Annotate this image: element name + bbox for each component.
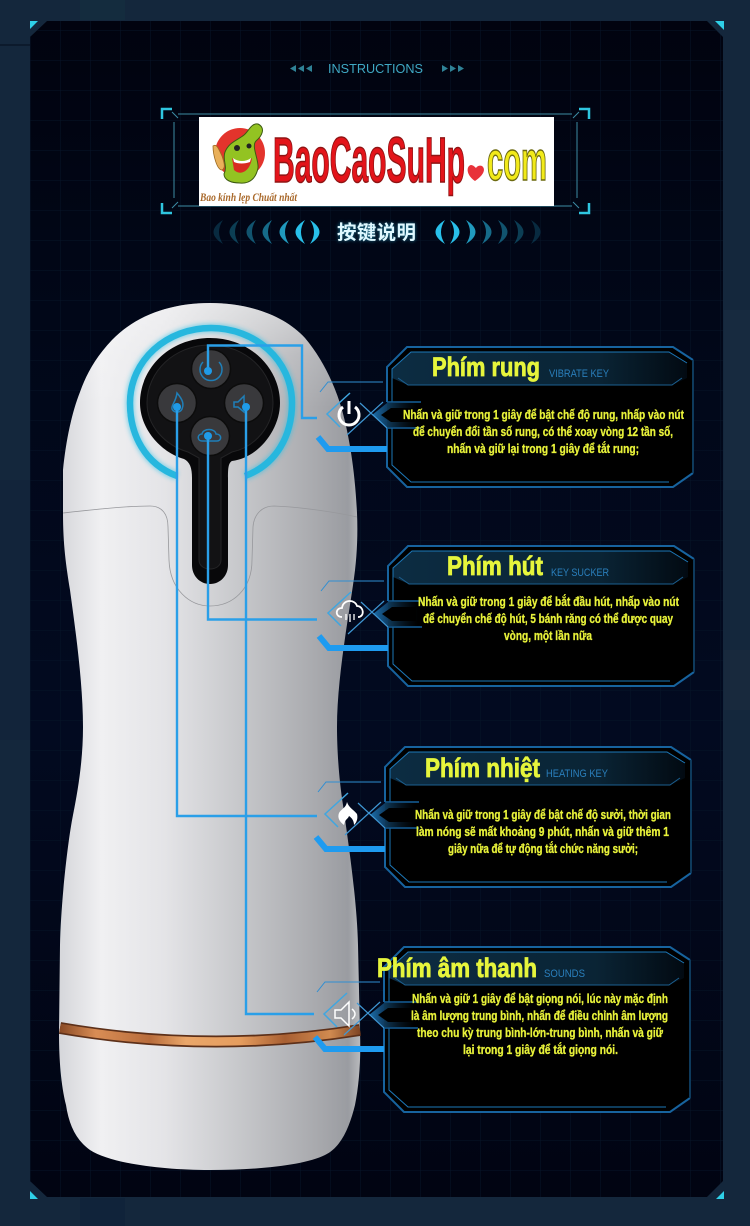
panel frame — [373, 546, 694, 686]
instructions heading — [290, 62, 464, 76]
panel text: heating key — [415, 753, 671, 856]
subheading: HEATING KEY — [546, 768, 609, 780]
instructions heading: INSTRUCTIONS — [328, 62, 423, 76]
connector dots — [173, 367, 250, 440]
connector: vibrate — [208, 346, 317, 418]
heading: Phím âm thanh — [377, 953, 537, 983]
body text: Nhấn và giữ trong 1 giây để bật chế độ sưởi, thời gian — [415, 808, 671, 822]
body text: lại trong 1 giây để tắt giọng nói. — [463, 1042, 618, 1057]
subheading: VIBRATE KEY — [549, 368, 610, 380]
panel text: key sucker — [418, 551, 680, 643]
heading text: 按键说明 — [337, 221, 416, 244]
icon: speaker — [315, 982, 384, 1049]
panel frame — [372, 347, 693, 487]
heading glow: 按键说明 — [337, 221, 416, 244]
logo wordmark: com — [487, 129, 547, 192]
right brackets — [436, 220, 540, 244]
vibrate button — [192, 350, 230, 388]
body silhouette — [59, 303, 360, 1170]
body text — [403, 408, 685, 456]
panel: heating key — [370, 747, 691, 887]
icon: heat flame — [316, 782, 385, 849]
panel text: sounds — [377, 953, 668, 1057]
body text: để chuyển đổi tần số rung, có thể xoay vòng 12 tần số, — [413, 425, 673, 439]
connector: heat — [177, 407, 317, 816]
left brackets — [214, 220, 320, 244]
logo mascot — [213, 124, 265, 183]
panel: key sucker — [373, 546, 694, 686]
logo wordmark: BaoCaoSuHp — [273, 124, 465, 196]
copper band — [60, 1028, 360, 1042]
body text: làm nóng sẽ mất khoảng 9 phút, nhấn và giữ thêm 1 — [416, 825, 669, 839]
cyan ring — [130, 328, 292, 476]
connector lines — [177, 346, 317, 1014]
panel text: vibrate key — [403, 352, 685, 456]
body text — [411, 992, 668, 1057]
chinese heading with brackets — [214, 220, 540, 244]
body text — [415, 808, 671, 856]
panel: sounds — [369, 947, 690, 1112]
logo tagline: Bao kính lẹp Chuất nhất — [199, 190, 298, 204]
button cluster — [140, 338, 280, 584]
heat button — [158, 384, 196, 422]
panel: vibrate key — [372, 347, 693, 487]
body text: theo chu kỳ trung bình-lớn-trung bình, nhấn và giữ — [417, 1026, 664, 1040]
body highlight — [63, 303, 357, 513]
logo bracket frame — [162, 109, 589, 213]
shell seam — [63, 506, 357, 606]
subheading: SOUNDS — [544, 968, 585, 980]
body text: nhấn và giữ lại trong 1 giây để tắt rung; — [447, 441, 639, 456]
suction button — [190, 416, 230, 456]
heading: Phím rung — [432, 352, 540, 382]
body text: Nhấn và giữ 1 giây để bật giọng nói, lúc này mặc định — [412, 992, 668, 1006]
icon: vibrate power — [318, 382, 387, 449]
logo wordmark — [273, 124, 547, 196]
heading: Phím hút — [447, 551, 543, 581]
panel frame — [370, 747, 691, 887]
connector: suction — [208, 436, 317, 620]
panel frame — [369, 947, 690, 1112]
body text: Nhấn và giữ trong 1 giây để bật chế độ rung, nhấp vào nút — [403, 408, 685, 422]
icon: suction cloud — [319, 581, 388, 648]
body text: để chuyển chế độ hút, 5 bánh răng có thể được quay — [423, 612, 673, 626]
body text: giây nữa để tự động tắt chức năng sưởi; — [448, 841, 638, 856]
connector: sound — [246, 407, 314, 1014]
logo — [199, 117, 554, 206]
body text: Nhấn và giữ trong 1 giây để bắt đầu hút, nhấp vào nút — [418, 594, 680, 609]
sound button — [224, 384, 264, 422]
product body — [59, 303, 360, 1170]
subheading: KEY SUCKER — [551, 567, 609, 579]
body text: là âm lượng trung bình, nhấn để điều chỉnh âm lượng — [411, 1009, 668, 1023]
body text — [418, 594, 680, 643]
heading: Phím nhiệt — [425, 753, 540, 783]
body text: vòng, một lần nữa — [504, 629, 593, 643]
